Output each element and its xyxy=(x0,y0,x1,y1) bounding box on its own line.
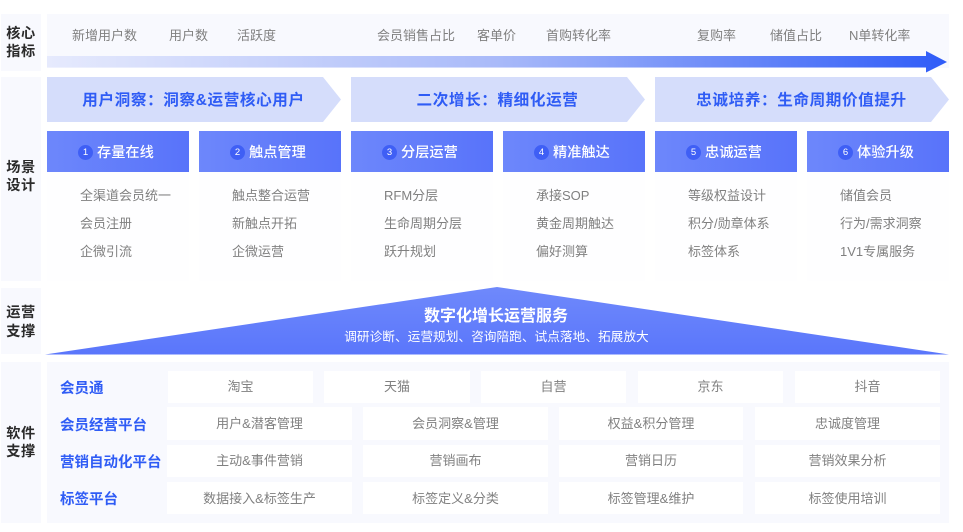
side label: core metrics: 核心 xyxy=(6,26,36,42)
row 4 cells: tag platform xyxy=(203,491,886,506)
triangle: digital growth services: 调研诊断、运营规划、咨询陪跑、试点落地、拓展放大 xyxy=(344,330,649,344)
column 2: touchpoints xyxy=(199,131,341,281)
arrow: metrics progression xyxy=(47,51,947,72)
row 2 cells: member operations: 会员洞察&管理 xyxy=(412,416,499,431)
side label: scenario design: 设计 xyxy=(6,178,36,194)
column 3: layered operations: RFM分层 xyxy=(384,188,438,203)
column 5: loyalty operations: 等级权益设计 xyxy=(688,188,766,203)
row label: member operations platform: 会员经营平台 xyxy=(60,418,147,434)
row 1 cells: channels: 抖音 xyxy=(854,379,880,394)
row 3 cells: marketing automation: 营销画布 xyxy=(429,453,482,468)
chevron: loyalty: 忠诚培养：生命周期价值提升 xyxy=(696,92,907,109)
column 2: touchpoints: 触点管理 xyxy=(249,145,306,161)
row 4 cells: tag platform: 数据接入&标签生产 xyxy=(203,491,316,506)
row 3 cells: marketing automation: 营销效果分析 xyxy=(808,453,886,468)
chevron: user insight xyxy=(47,77,341,122)
column 1: stock online xyxy=(47,131,189,281)
row 3 cells: marketing automation: 营销日历 xyxy=(625,453,677,468)
panel: software support xyxy=(47,362,949,523)
row 4 cells: tag platform: 标签定义&分类 xyxy=(412,491,499,506)
column 6: experience upgrade: 体验升级 xyxy=(857,145,914,161)
side label: scenario design: 场景 xyxy=(6,160,36,176)
row 3 cells: marketing automation xyxy=(216,453,886,468)
column 3: layered operations: 跃升规划 xyxy=(384,244,436,259)
row 2 cells: member operations: 权益&积分管理 xyxy=(608,416,694,431)
row 4 cells: tag platform: 标签管理&维护 xyxy=(608,491,694,506)
column 4: precise reach: 4 xyxy=(539,147,544,158)
column 5: loyalty operations: 5 xyxy=(691,147,696,158)
side label: software support xyxy=(1,362,41,523)
metric labels: 会员销售占比 xyxy=(377,28,455,43)
metric labels: 活跃度 xyxy=(237,28,276,43)
column 4: precise reach: 精准触达 xyxy=(553,145,610,161)
column 6: experience upgrade xyxy=(807,131,949,281)
row label: marketing automation platform: 营销自动化平台 xyxy=(60,454,162,470)
side label: operations support: 运营 xyxy=(6,305,36,321)
column 4: precise reach: 偏好测算 xyxy=(536,244,588,259)
column 1: stock online: 会员注册 xyxy=(80,216,132,231)
metric labels: 用户数 xyxy=(169,28,208,43)
side label: operations support: 支撑 xyxy=(6,324,36,340)
chevron: secondary growth xyxy=(351,77,645,122)
row 3 cells: marketing automation: 主动&事件营销 xyxy=(216,453,303,468)
column 4: precise reach xyxy=(503,131,645,281)
side label: operations support xyxy=(1,288,41,354)
column 4: precise reach: 黄金周期触达 xyxy=(536,216,614,231)
row 4 cells: tag platform: 标签使用培训 xyxy=(808,491,886,506)
column 5: loyalty operations: 标签体系 xyxy=(688,244,740,259)
row 1 cells: channels xyxy=(227,379,880,394)
row 2 cells: member operations: 忠诚度管理 xyxy=(815,416,880,431)
metric labels: 客单价 xyxy=(477,28,516,43)
column 1: stock online: 企微引流 xyxy=(80,244,132,259)
column 3: layered operations xyxy=(351,131,493,281)
row 1 cells: channels: 自营 xyxy=(540,379,566,394)
column 6: experience upgrade: 储值会员 xyxy=(840,188,892,203)
metric labels: 复购率 xyxy=(697,28,736,43)
row 2 cells: member operations: 用户&潜客管理 xyxy=(216,416,303,431)
chevron: loyalty xyxy=(655,77,949,122)
row 1 cells: channels: 天猫 xyxy=(384,379,410,394)
column 2: touchpoints: 2 xyxy=(235,147,240,158)
side label: software support: 软件 xyxy=(6,426,36,442)
column 6: experience upgrade: 行为/需求洞察 xyxy=(840,216,922,231)
row 2 cells: member operations xyxy=(216,416,880,431)
triangle: digital growth services xyxy=(45,287,949,354)
side label: core metrics: 指标 xyxy=(6,44,36,60)
metric labels xyxy=(72,28,910,43)
column 2: touchpoints: 企微运营 xyxy=(232,244,284,259)
column 5: loyalty operations xyxy=(655,131,797,281)
metric labels: N单转化率 xyxy=(849,28,910,43)
row 1 cells: channels: 京东 xyxy=(697,379,724,394)
row label: tag platform: 标签平台 xyxy=(60,492,118,508)
column 5: loyalty operations: 忠诚运营 xyxy=(705,145,762,161)
metric labels: 储值占比 xyxy=(770,28,822,43)
column 3: layered operations: 生命周期分层 xyxy=(384,216,462,231)
row 1 cells: channels: 淘宝 xyxy=(227,379,254,394)
triangle: digital growth services: 数字化增长运营服务 xyxy=(424,306,568,325)
column 2: touchpoints: 触点整合运营 xyxy=(232,188,310,203)
row label: member hub: 会员通 xyxy=(60,380,104,396)
side label: scenario design xyxy=(1,77,41,281)
column 2: touchpoints: 新触点开拓 xyxy=(232,216,297,231)
column 1: stock online: 全渠道会员统一 xyxy=(80,188,171,203)
column 3: layered operations: 3 xyxy=(387,147,392,158)
column 1: stock online: 1 xyxy=(83,147,88,158)
chevron: user insight: 用户洞察：洞察&运营核心用户 xyxy=(82,92,305,109)
column 1: stock online: 存量在线 xyxy=(97,145,154,161)
panel: core metrics xyxy=(47,14,949,68)
chevron: secondary growth: 二次增长：精细化运营 xyxy=(417,92,578,109)
column 5: loyalty operations: 积分/勋章体系 xyxy=(688,216,770,231)
column 6: experience upgrade: 1V1专属服务 xyxy=(840,244,915,259)
side label: software support: 支撑 xyxy=(6,444,36,460)
column 6: experience upgrade: 6 xyxy=(843,147,848,158)
column 3: layered operations: 分层运营 xyxy=(401,145,458,161)
side label: core metrics xyxy=(1,14,41,71)
metric labels: 新增用户数 xyxy=(72,28,137,43)
metric labels: 首购转化率 xyxy=(546,28,611,43)
column 4: precise reach: 承接SOP xyxy=(536,188,589,203)
